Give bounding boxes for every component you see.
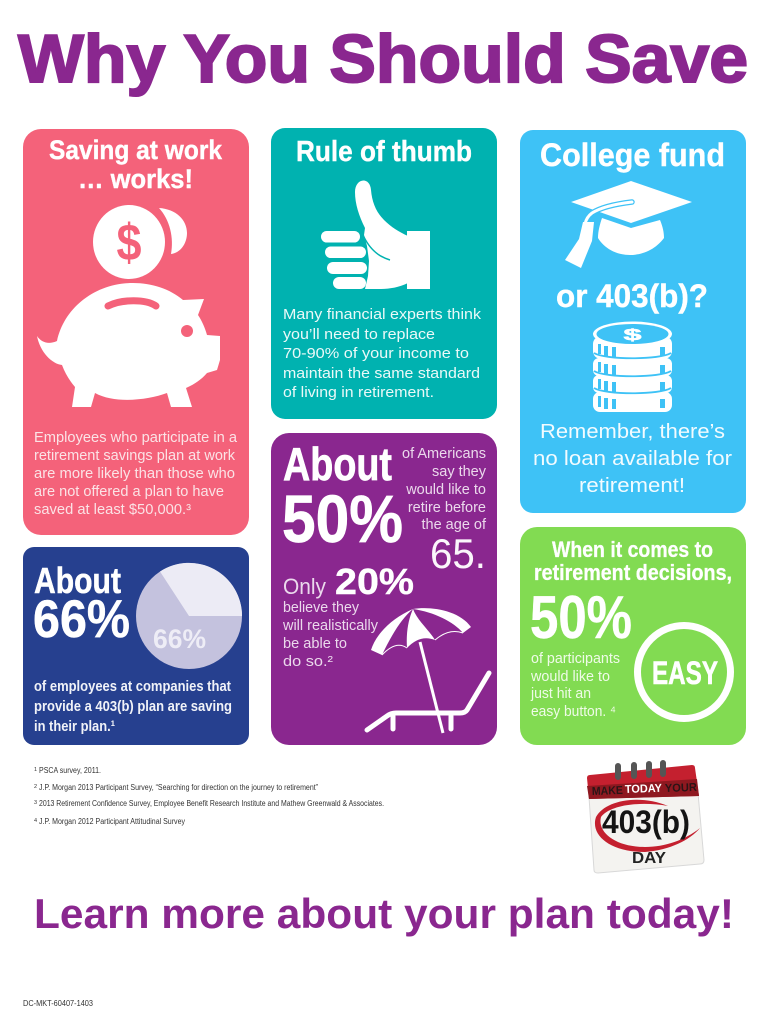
text block: saving at work: are not offered a plan to have [34,484,224,500]
text block: of Americans [402,446,487,577]
panel: college fund [520,130,746,513]
text block: rule of thumb: you’ll need to replace [283,327,435,343]
text block: participants: just hit an [530,686,591,702]
heading: or 403(b)?: or 403(b)? [556,278,708,314]
heading: saving at work: … works! [78,164,193,194]
text block: remember [533,421,732,497]
icon: coin and piggy bank [37,205,220,407]
panel: about 50 percent [271,433,497,745]
stat: about 66%: 66% [33,590,130,649]
stat: about 66%: About [34,560,121,601]
stat: only 20% [283,561,414,602]
text block: remember: Remember, there’s [540,421,725,443]
icon: coin stack [593,322,672,412]
footnotes [34,766,384,826]
text block: saving at work: saved at least $50,000.³ [34,502,191,518]
icon: thumbs up [321,180,430,289]
text block: believe they: be able to [283,636,347,652]
footnotes: 3 [34,800,37,806]
panel: about 66 percent [23,547,249,745]
text block: saving at work: are more likely than those who [34,466,235,482]
text block: participants: of participants [531,651,620,667]
heading: saving at work: Saving at work [49,135,223,165]
icon: graduation cap [565,181,692,268]
stat: only 20%: 20% [335,561,414,602]
text block: saving at work: Employees who participate in a [34,430,238,446]
pie chart: 66% [136,563,242,669]
icon: make today your 403(b) day calendar: TODAY [625,783,662,796]
heading: retirement decisions: When it comes to [552,537,713,562]
stat: about 50% [282,438,403,557]
stat: about 66% [33,560,130,649]
footnotes: J.P. Morgan 2013 Participant Survey, “Searching for direction on the journey to retirement” [39,783,318,792]
heading: retirement decisions [534,537,732,585]
text block: participants [530,651,620,720]
text block: saving at work [34,430,238,518]
footnotes: 1 [34,767,37,773]
icon: easy button [638,626,730,718]
pie chart: 66%: 66% [153,624,206,654]
footnotes: PSCA survey, 2011. [39,766,101,775]
icon: make today your 403(b) day calendar: 403(b) [602,804,690,840]
text block: 403(b) savers: in their plan.¹ [34,718,115,735]
stat: 50%: 50% [530,584,632,651]
call to action: Learn more about your plan today! [34,890,734,937]
text block: remember: retirement! [579,475,685,497]
text block: rule of thumb: maintain the same standard [283,366,480,382]
text block: rule of thumb: of living in retirement. [283,385,434,401]
icon: make today your 403(b) day calendar: DAY [632,850,666,867]
panel: rule of thumb [271,128,497,419]
text block: of Americans: the age of [422,517,487,533]
icon: coin and piggy bank: $ [116,214,142,272]
icon: beach umbrella and lounger [367,608,489,733]
icon: easy button: EASY [652,655,718,691]
text block: saving at work: retirement savings plan at work [34,448,236,464]
heading: rule of thumb: Rule of thumb [296,136,472,168]
heading: college fund: College fund [540,137,725,173]
footnotes: 2 [34,784,37,790]
text block: 403(b) savers: of employees at companies that [34,678,231,695]
text block: 403(b) savers: provide a 403(b) plan are saving [34,698,232,715]
text block: participants: would like to [530,669,610,685]
stat: about 50%: 50% [282,482,403,557]
text block: believe they: do so.² [283,654,333,670]
document code: DC-MKT-60407-1403 [23,998,93,1008]
text block: 403(b) savers [34,678,232,735]
text block: believe they: believe they [283,600,360,616]
text block: participants: easy button. ⁴ [531,704,616,720]
text block: of Americans: retire before [408,500,486,516]
icon: make today your 403(b) day calendar [587,763,704,873]
title: Why You Should Save [18,21,748,97]
heading: retirement decisions: retirement decisions, [534,560,732,585]
text block: rule of thumb: 70-90% of your income to [283,346,469,362]
stat: only 20%: Only [283,574,326,599]
text block: of Americans: would like to [405,482,486,498]
text block: remember: no loan available for [533,448,732,470]
text block: rule of thumb: Many financial experts think [283,307,482,323]
text block: rule of thumb [283,307,482,401]
footnotes: J.P. Morgan 2012 Participant Attitudinal Survey [39,817,185,826]
text block: of Americans: 65. [430,530,486,577]
heading: saving at work [49,135,223,194]
text block: of Americans: say they [432,464,487,480]
panel: retirement decisions [520,527,746,745]
text block: believe they: will realistically [282,618,379,634]
icon: make today your 403(b) day calendar: MAKE [592,785,623,798]
footnotes: 2013 Retirement Confidence Survey, Employee Benefit Research Institute and Mathew Greenwald & Associates. [39,799,384,808]
text block: of Americans: of Americans [402,446,486,462]
footnotes: 4 [34,818,37,824]
stat: about 50%: About [283,438,392,490]
text block: believe they [282,600,379,670]
icon: coin stack: $ [624,327,642,344]
icon: make today your 403(b) day calendar: YOUR [665,782,698,795]
panel: saving at work [23,129,249,535]
